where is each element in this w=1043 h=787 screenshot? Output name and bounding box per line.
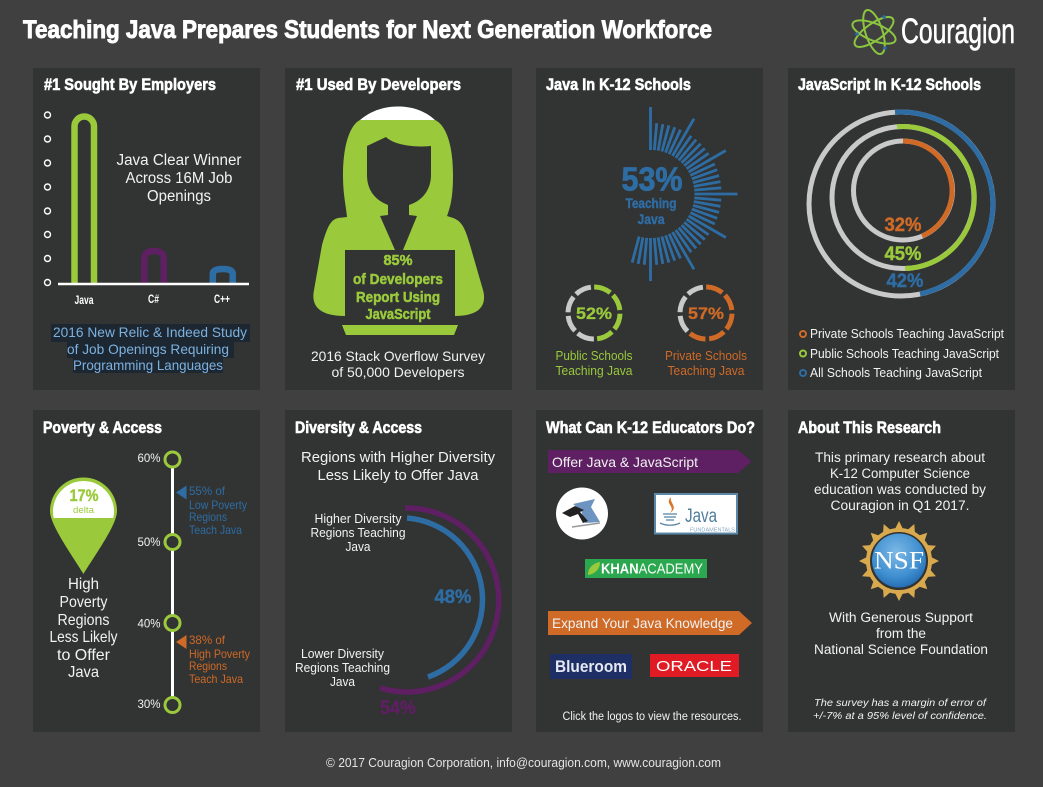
legend: All Schools Teaching JavaScript bbox=[810, 365, 982, 380]
panel: JavaScript in K-12 schools bbox=[788, 68, 1015, 390]
callout: low poverty 55%: Teach Java bbox=[189, 523, 242, 537]
callout: low poverty 55%: 55% of bbox=[189, 484, 226, 498]
label: lower diversity: Java bbox=[330, 675, 355, 689]
callout: low poverty 55%: Low Poverty bbox=[189, 498, 247, 512]
ring: private schools 57% bbox=[665, 276, 747, 378]
callout: low poverty 55% bbox=[176, 484, 247, 537]
label: higher diversity: Java bbox=[346, 540, 371, 554]
panel: poverty and access bbox=[33, 410, 260, 732]
pin caption: High bbox=[68, 576, 99, 593]
chart callout: Java Clear Winner bbox=[116, 152, 242, 169]
research description: This primary research about bbox=[815, 450, 985, 465]
panel: used by developers bbox=[285, 68, 512, 390]
pin caption: Less Likely bbox=[50, 629, 118, 646]
panel: Java in K-12 schools bbox=[536, 68, 763, 390]
icon: 17% delta pin bbox=[50, 477, 117, 574]
research description bbox=[814, 450, 986, 513]
label: lower diversity: Lower Diversity bbox=[301, 647, 385, 661]
pin caption: to Offer bbox=[57, 647, 111, 664]
ring values: 42% bbox=[886, 271, 924, 292]
ring values: 32% bbox=[884, 215, 922, 236]
bar chart: C# bbox=[148, 292, 159, 306]
legend bbox=[800, 326, 1004, 380]
callout: low poverty 55%: Regions bbox=[189, 510, 227, 524]
support statement: National Science Foundation bbox=[814, 642, 988, 657]
stat: 53% teaching Java: 53% bbox=[622, 160, 682, 198]
pin caption: Regions bbox=[58, 612, 110, 629]
callout: high poverty 38% bbox=[176, 633, 250, 686]
logo: Khan Academy: KHANACADEMY bbox=[601, 560, 703, 578]
banner: offer Java and JavaScript bbox=[548, 450, 752, 473]
stat: 85% bbox=[353, 253, 443, 323]
footer: © 2017 Couragion Corporation, info@couragion.com, www.couragion.com bbox=[326, 756, 721, 770]
chart: radial 53% rays bbox=[632, 107, 738, 281]
chart callout: Across 16M Job bbox=[126, 170, 232, 187]
panel: diversity and access bbox=[285, 410, 512, 732]
ring: public schools 52%: Teaching Java bbox=[556, 363, 633, 378]
ring: private schools 57%: Private Schools bbox=[665, 348, 747, 363]
bar chart: C++ bbox=[214, 292, 230, 306]
chart: percentage timeline: 30% bbox=[137, 699, 160, 711]
margin of error note bbox=[813, 697, 987, 722]
chart: concentric rings bbox=[809, 112, 993, 296]
callout: high poverty 38%: Regions bbox=[189, 659, 227, 673]
source note: Programming Languages bbox=[73, 357, 223, 373]
panel: what educators can do bbox=[536, 410, 763, 732]
ring: public schools 52%: Public Schools bbox=[556, 348, 633, 363]
bar chart: Java bbox=[74, 293, 94, 307]
ring: public schools 52% bbox=[556, 286, 633, 378]
banner: expand Java knowledge bbox=[548, 611, 752, 635]
logo: Java Fundamentals bbox=[655, 494, 737, 534]
icon: developer silhouette at laptop bbox=[313, 106, 484, 335]
support statement: With Generous Support bbox=[829, 610, 973, 625]
label: lower diversity bbox=[295, 647, 390, 689]
chart: percentage timeline bbox=[137, 452, 180, 712]
chart callout: Openings bbox=[147, 188, 211, 205]
stat: 85%: of Developers bbox=[353, 272, 443, 288]
chart: percentage timeline: 40% bbox=[137, 618, 160, 630]
heading: About This Research bbox=[798, 419, 941, 437]
logo: Blueroom: Blueroom bbox=[555, 657, 627, 676]
heading: #1 Sought By Employers bbox=[44, 76, 216, 94]
icon: 17% delta pin: delta bbox=[73, 505, 95, 516]
source note bbox=[51, 324, 250, 373]
pin caption: Java bbox=[68, 664, 99, 681]
callout: high poverty 38%: 38% of bbox=[189, 633, 226, 647]
heading: JavaScript In K-12 Schools bbox=[798, 76, 981, 94]
chart: percentage timeline: 50% bbox=[137, 537, 160, 549]
logo: Couragion bbox=[849, 7, 1015, 57]
heading: Java In K-12 Schools bbox=[546, 76, 691, 94]
banner: offer Java and JavaScript: Offer Java & JavaScript bbox=[552, 454, 698, 470]
logo: Java Fundamentals: FUNDAMENTALS bbox=[690, 528, 735, 534]
logo: NSF seal bbox=[859, 521, 939, 601]
source note: 2016 New Relic & Indeed Study bbox=[53, 324, 247, 340]
stat: 53% teaching Java: Java bbox=[638, 211, 665, 227]
pin caption bbox=[50, 576, 118, 681]
ring: private schools 57%: Teaching Java bbox=[668, 363, 745, 378]
ring values: 45% bbox=[884, 244, 922, 265]
label: lower diversity: Regions Teaching bbox=[295, 661, 390, 675]
stat: 85%: JavaScript bbox=[366, 307, 431, 323]
label: higher diversity bbox=[310, 512, 406, 554]
logo: Blueroom bbox=[550, 654, 632, 679]
logo: Oracle bbox=[650, 654, 739, 677]
callout: high poverty 38%: Teach Java bbox=[189, 672, 243, 686]
icon: 17% delta pin: 17% bbox=[70, 486, 98, 505]
subheading: Regions with Higher Diversity bbox=[301, 449, 495, 466]
panel: about this research bbox=[788, 410, 1015, 732]
label: higher diversity: Higher Diversity bbox=[314, 512, 402, 526]
legend: Public Schools Teaching JavaScript bbox=[810, 346, 999, 361]
ring values bbox=[884, 215, 924, 292]
research description: education was conducted by bbox=[814, 482, 986, 497]
ring: public schools 52%: 52% bbox=[576, 304, 612, 323]
margin of error note: +/-7% at a 95% level of confidence. bbox=[813, 710, 987, 722]
stat: 85%: 85% bbox=[384, 253, 413, 269]
chart callout bbox=[116, 152, 242, 205]
source note: of Job Openings Requiring bbox=[67, 341, 229, 357]
logo: Oracle: ORACLE bbox=[656, 658, 732, 675]
value: 48%: 48% bbox=[434, 587, 472, 608]
ring: private schools 57%: 57% bbox=[688, 304, 724, 323]
source note: 2016 Stack Overflow Survey bbox=[311, 348, 485, 364]
chart: percentage timeline: 60% bbox=[137, 453, 160, 465]
label: higher diversity: Regions Teaching bbox=[310, 526, 406, 540]
logo: Java Fundamentals: Java bbox=[685, 506, 717, 527]
value: 54%: 54% bbox=[380, 698, 416, 719]
heading: Diversity & Access bbox=[295, 419, 422, 437]
panel: sought by employers bbox=[33, 68, 260, 390]
pin caption: Poverty bbox=[60, 594, 108, 611]
subheading bbox=[301, 449, 495, 484]
heading: #1 Used By Developers bbox=[296, 76, 461, 94]
support statement: from the bbox=[876, 626, 926, 641]
source note: of 50,000 Developers bbox=[332, 364, 464, 380]
banner: expand Java knowledge: Expand Your Java Knowledge bbox=[552, 615, 733, 631]
bar chart bbox=[44, 112, 249, 307]
research description: K-12 Computer Science bbox=[830, 466, 970, 481]
logo: NSF seal: NSF bbox=[874, 548, 924, 574]
heading: Poverty & Access bbox=[43, 419, 162, 437]
legend: Private Schools Teaching JavaScript bbox=[810, 326, 1004, 341]
stat: 53% teaching Java: Teaching bbox=[626, 195, 676, 211]
research description: Couragion in Q1 2017. bbox=[830, 498, 970, 513]
logo: BlueJ bbox=[556, 488, 608, 540]
resources note: Click the logos to view the resources. bbox=[562, 711, 742, 723]
source note bbox=[311, 348, 485, 380]
chart: diversity arcs bbox=[380, 508, 499, 692]
stat: 85%: Report Using bbox=[356, 290, 440, 306]
callout: high poverty 38%: High Poverty bbox=[189, 647, 250, 661]
title: Teaching Java Prepares Students for Next Generation Workforce bbox=[23, 16, 712, 44]
margin of error note: The survey has a margin of error of bbox=[814, 697, 987, 709]
subheading: Less Likely to Offer Java bbox=[318, 467, 479, 484]
heading: What Can K-12 Educators Do? bbox=[546, 419, 755, 437]
stat: 53% teaching Java bbox=[622, 160, 682, 227]
support statement bbox=[814, 610, 988, 657]
